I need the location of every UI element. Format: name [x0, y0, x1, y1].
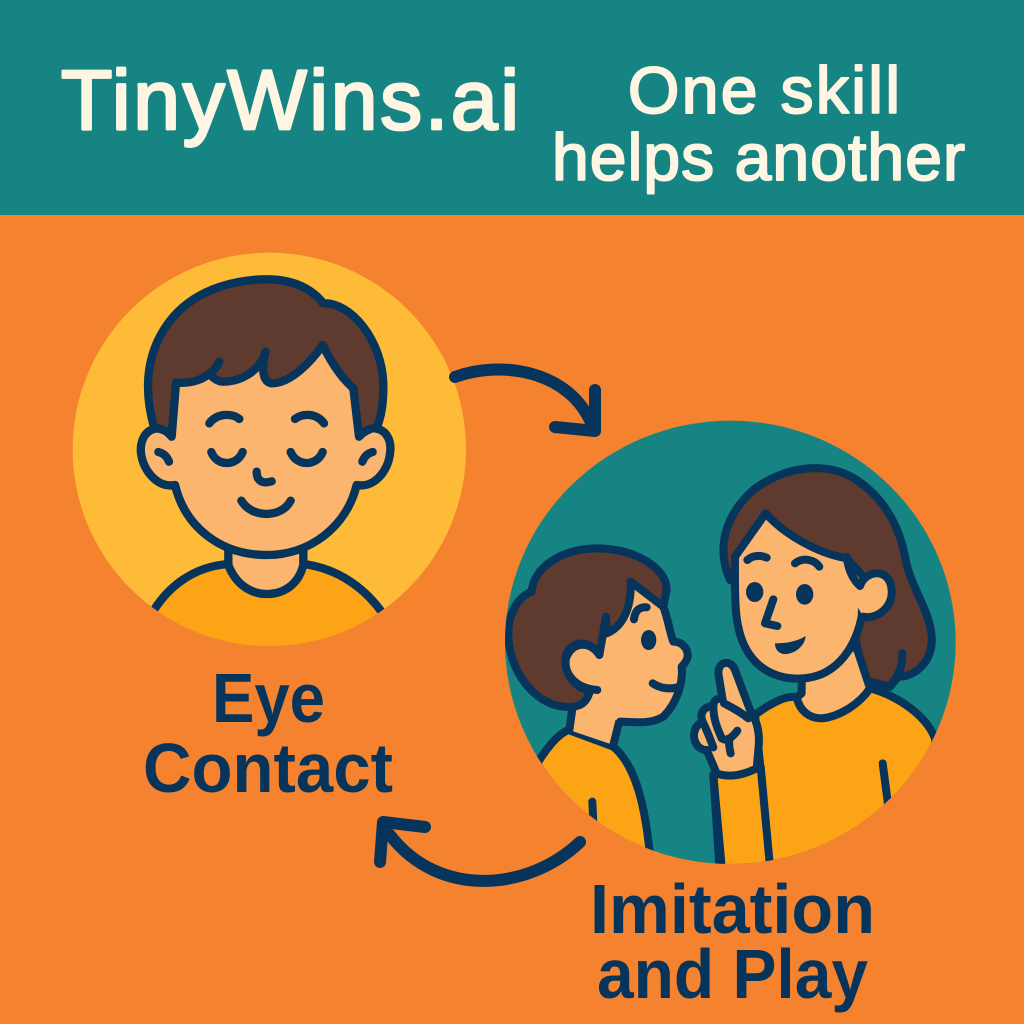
child smile	[653, 683, 680, 688]
label: eye contact: Contact	[143, 729, 393, 807]
woman back hair	[723, 468, 932, 687]
head skin	[141, 345, 390, 555]
woman ear	[858, 577, 888, 614]
pointing hand	[694, 663, 759, 776]
child shirt	[537, 726, 654, 851]
child hair	[508, 548, 667, 707]
heading: tagline: helps another	[552, 120, 965, 194]
label: eye contact: Eye	[212, 659, 325, 737]
hair	[148, 279, 383, 437]
panel: imitation and play scene	[505, 421, 956, 877]
label: imitation and play: and Play	[597, 935, 868, 1013]
woman face	[735, 513, 863, 679]
inner ear lines	[158, 452, 169, 462]
shirt	[151, 560, 384, 646]
label: eye contact	[143, 659, 393, 807]
arrow: eye contact to imitation	[455, 369, 595, 431]
label: imitation and play	[590, 870, 875, 1013]
arrow: imitation back to eye contact	[380, 822, 580, 881]
smile	[241, 501, 291, 514]
panel: eye contact boy	[73, 253, 466, 660]
woman mouth	[775, 636, 806, 654]
eyebrows	[209, 415, 239, 423]
header band	[0, 0, 1024, 215]
closed eyes	[211, 452, 243, 463]
woman neck	[801, 652, 866, 714]
title: brand: TinyWins.ai	[61, 53, 519, 147]
woman brows	[747, 556, 767, 560]
ears and jaw outline	[141, 428, 390, 555]
woman nose	[765, 599, 777, 626]
child eye	[641, 630, 656, 650]
nose	[257, 472, 272, 482]
child face	[600, 590, 684, 720]
sleeve lines	[713, 763, 888, 867]
neck	[228, 547, 303, 594]
child brow	[634, 607, 647, 619]
woman shirt	[713, 688, 943, 877]
woman eyes	[746, 582, 763, 602]
heading: tagline	[552, 53, 965, 194]
heading: tagline: One skill	[628, 53, 900, 127]
label: imitation and play: Imitation	[590, 870, 875, 948]
child ear	[570, 648, 602, 682]
child neck	[573, 706, 616, 744]
